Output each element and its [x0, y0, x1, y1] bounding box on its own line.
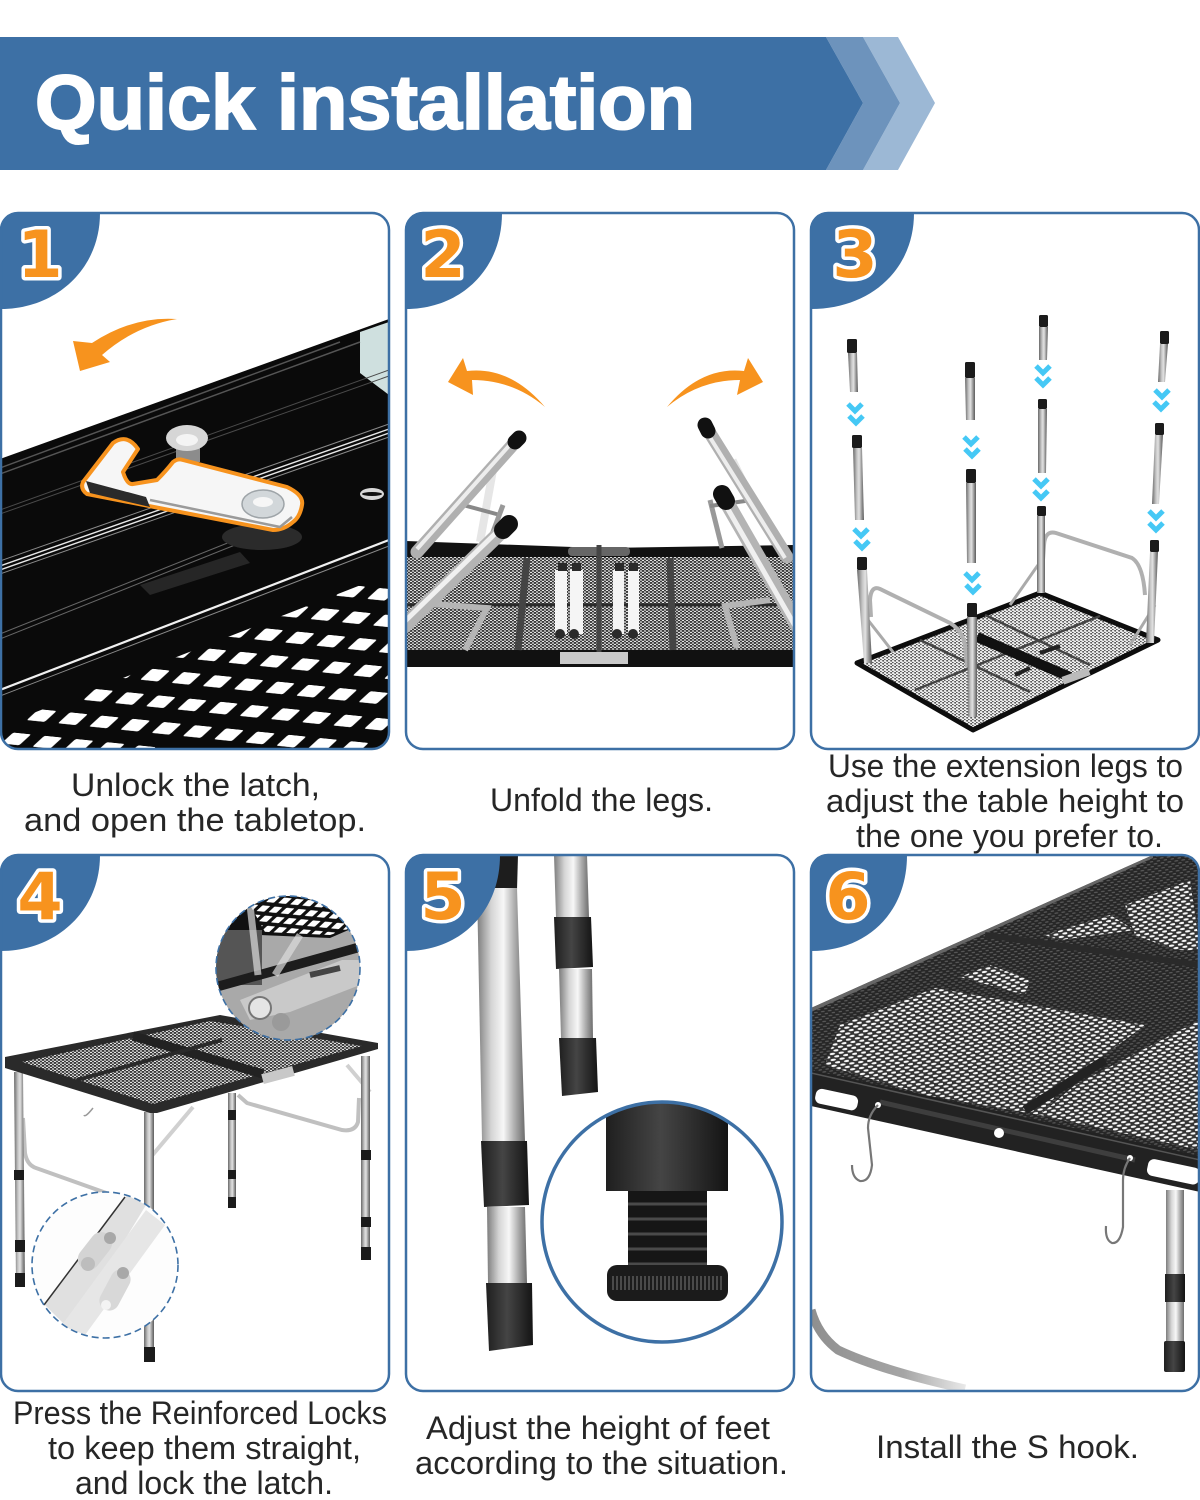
- caption 2: Unfold the legs.: [490, 782, 713, 818]
- mesh tabletop and hardware: [811, 855, 1200, 1389]
- U-shaped leg frames: [870, 532, 1145, 667]
- detail circle: threaded foot: [542, 1100, 782, 1342]
- arrow: orange curved: [73, 319, 177, 371]
- badge 1: [1, 213, 100, 309]
- header banner: [0, 37, 935, 170]
- icon: left S hook: [852, 1105, 878, 1181]
- arrow: orange right: [667, 358, 763, 407]
- badge 4: 4: [17, 860, 63, 935]
- badge 3: [811, 213, 914, 309]
- photo: black table frame with latch: [0, 319, 389, 750]
- panel 1: unlock the latch: [0, 213, 389, 750]
- badge 6: 6: [825, 860, 871, 935]
- badge 2: 2: [420, 218, 466, 293]
- badge 1: 1: [17, 218, 63, 293]
- panel 2: unfold the legs: [400, 213, 800, 749]
- detail circle: lock closeup: [32, 1192, 178, 1338]
- telescopic legs: [477, 855, 598, 1351]
- panel 4: reinforced locks: [1, 855, 389, 1391]
- latch with orange outline: [82, 439, 302, 530]
- leg columns: [847, 315, 1169, 717]
- badge 6: [811, 855, 907, 951]
- table frame upside down: [857, 565, 1158, 730]
- caption 1: and open the tabletop.: [24, 802, 366, 838]
- panel 5: adjust feet: [406, 855, 794, 1391]
- caption 3: Use the extension legs to: [828, 748, 1183, 784]
- arrow: orange left: [448, 358, 545, 407]
- title: Quick installation: [35, 60, 695, 146]
- badge 5: 5: [420, 860, 466, 935]
- badge 4: [1, 855, 100, 951]
- caption 5: Adjust the height of feet: [426, 1410, 770, 1446]
- caption 4: Press the Reinforced Locks: [13, 1395, 387, 1431]
- caption 1: [24, 767, 366, 838]
- photo: folded table with legs: [400, 425, 800, 667]
- panel 3: extension legs: [811, 213, 1199, 749]
- badge 3: 3: [832, 218, 878, 293]
- caption 5: according to the situation.: [415, 1445, 788, 1481]
- badge 5: [406, 855, 500, 951]
- detail circle: latch closeup: [216, 896, 360, 1040]
- caption 3: the one you prefer to.: [856, 818, 1163, 854]
- icon: cyan down chevrons: [848, 366, 1169, 592]
- caption 6: Install the S hook.: [876, 1429, 1139, 1465]
- panel 6: install S hook: [811, 855, 1200, 1391]
- caption 1: Unlock the latch,: [71, 767, 320, 803]
- caption 4: [13, 1395, 387, 1500]
- caption 3: adjust the table height to: [826, 783, 1184, 819]
- caption 5: [415, 1410, 788, 1481]
- caption 4: and lock the latch.: [75, 1465, 333, 1500]
- assembled table: [5, 1015, 378, 1362]
- icon: right S hook: [1106, 1158, 1130, 1243]
- icon: top rivet: [166, 425, 208, 462]
- caption 4: to keep them straight,: [48, 1430, 361, 1466]
- badge 2: [406, 213, 502, 309]
- caption 3: [826, 748, 1184, 854]
